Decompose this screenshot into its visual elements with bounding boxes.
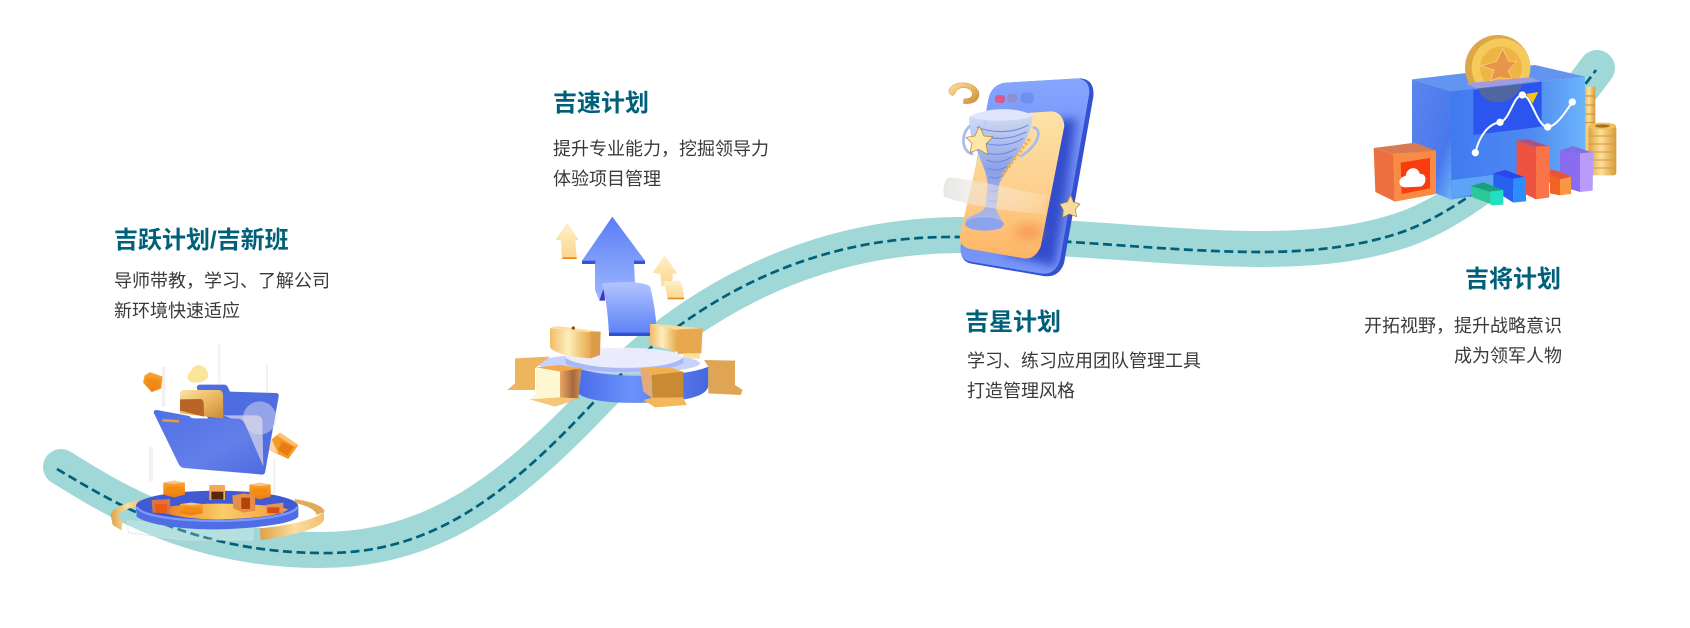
small amber cubes	[152, 481, 283, 515]
stage 1 description	[114, 271, 330, 321]
gold hook ring	[949, 83, 979, 104]
gear platform	[537, 348, 708, 403]
phone body	[961, 78, 1093, 276]
big blue arrow	[582, 217, 657, 336]
gold star coin	[1465, 35, 1530, 83]
stage 3 description: 打造管理风格	[967, 381, 1075, 401]
white line chart	[1472, 91, 1576, 156]
illustration: coin box with chart	[1374, 35, 1616, 205]
stage 4 description: 成为领军人物	[1454, 346, 1562, 366]
illustration: folder on ring platform	[111, 343, 325, 540]
stage 4 description: 开拓视野，提升战略意识	[1364, 316, 1562, 336]
stage 4 description	[1364, 316, 1562, 366]
stage 3 description: 学习、练习应用团队管理工具	[967, 351, 1201, 371]
gold ring right	[260, 499, 325, 540]
stage 2 description	[553, 139, 769, 189]
stage 3 heading: 吉星计划	[965, 309, 1061, 336]
orange card	[960, 111, 1064, 259]
blue folder	[154, 385, 279, 475]
road: winding teal path	[57, 68, 1597, 553]
3D bars	[1471, 139, 1593, 205]
floating amber cubes and cloud	[143, 365, 298, 459]
glass light bars	[149, 343, 275, 495]
blue translucent box	[1412, 77, 1585, 200]
small rising arrows	[556, 224, 684, 299]
gold block top left	[550, 326, 601, 358]
illustration: trophy on phone	[943, 78, 1093, 276]
gold stars	[966, 126, 1080, 217]
stage 1 description: 新环境快速适应	[114, 301, 240, 321]
box top face	[1412, 65, 1585, 91]
blue platform	[136, 491, 298, 529]
stage 1 description: 导师带教，学习、了解公司	[114, 271, 330, 291]
stage 4 heading: 吉将计划	[1465, 266, 1561, 293]
stage 2 description: 提升专业能力，挖掘领导力	[553, 139, 769, 159]
stage 3 description	[967, 351, 1201, 401]
stage 2 description: 体验项目管理	[553, 169, 661, 189]
orange cube with cloud	[1374, 143, 1436, 202]
glass panel below platform	[127, 521, 253, 540]
glass band	[943, 177, 1047, 214]
illustration: rising arrows on gear platform	[507, 217, 743, 407]
gold side blocks	[507, 357, 743, 407]
stage 2 heading: 吉速计划	[553, 90, 649, 117]
glass trophy	[963, 109, 1038, 231]
gold ring left	[111, 500, 140, 531]
back coin stacks	[1583, 87, 1616, 175]
gold block top right	[650, 324, 703, 359]
stage 1 heading: 吉跃计划/吉新班	[114, 227, 289, 254]
